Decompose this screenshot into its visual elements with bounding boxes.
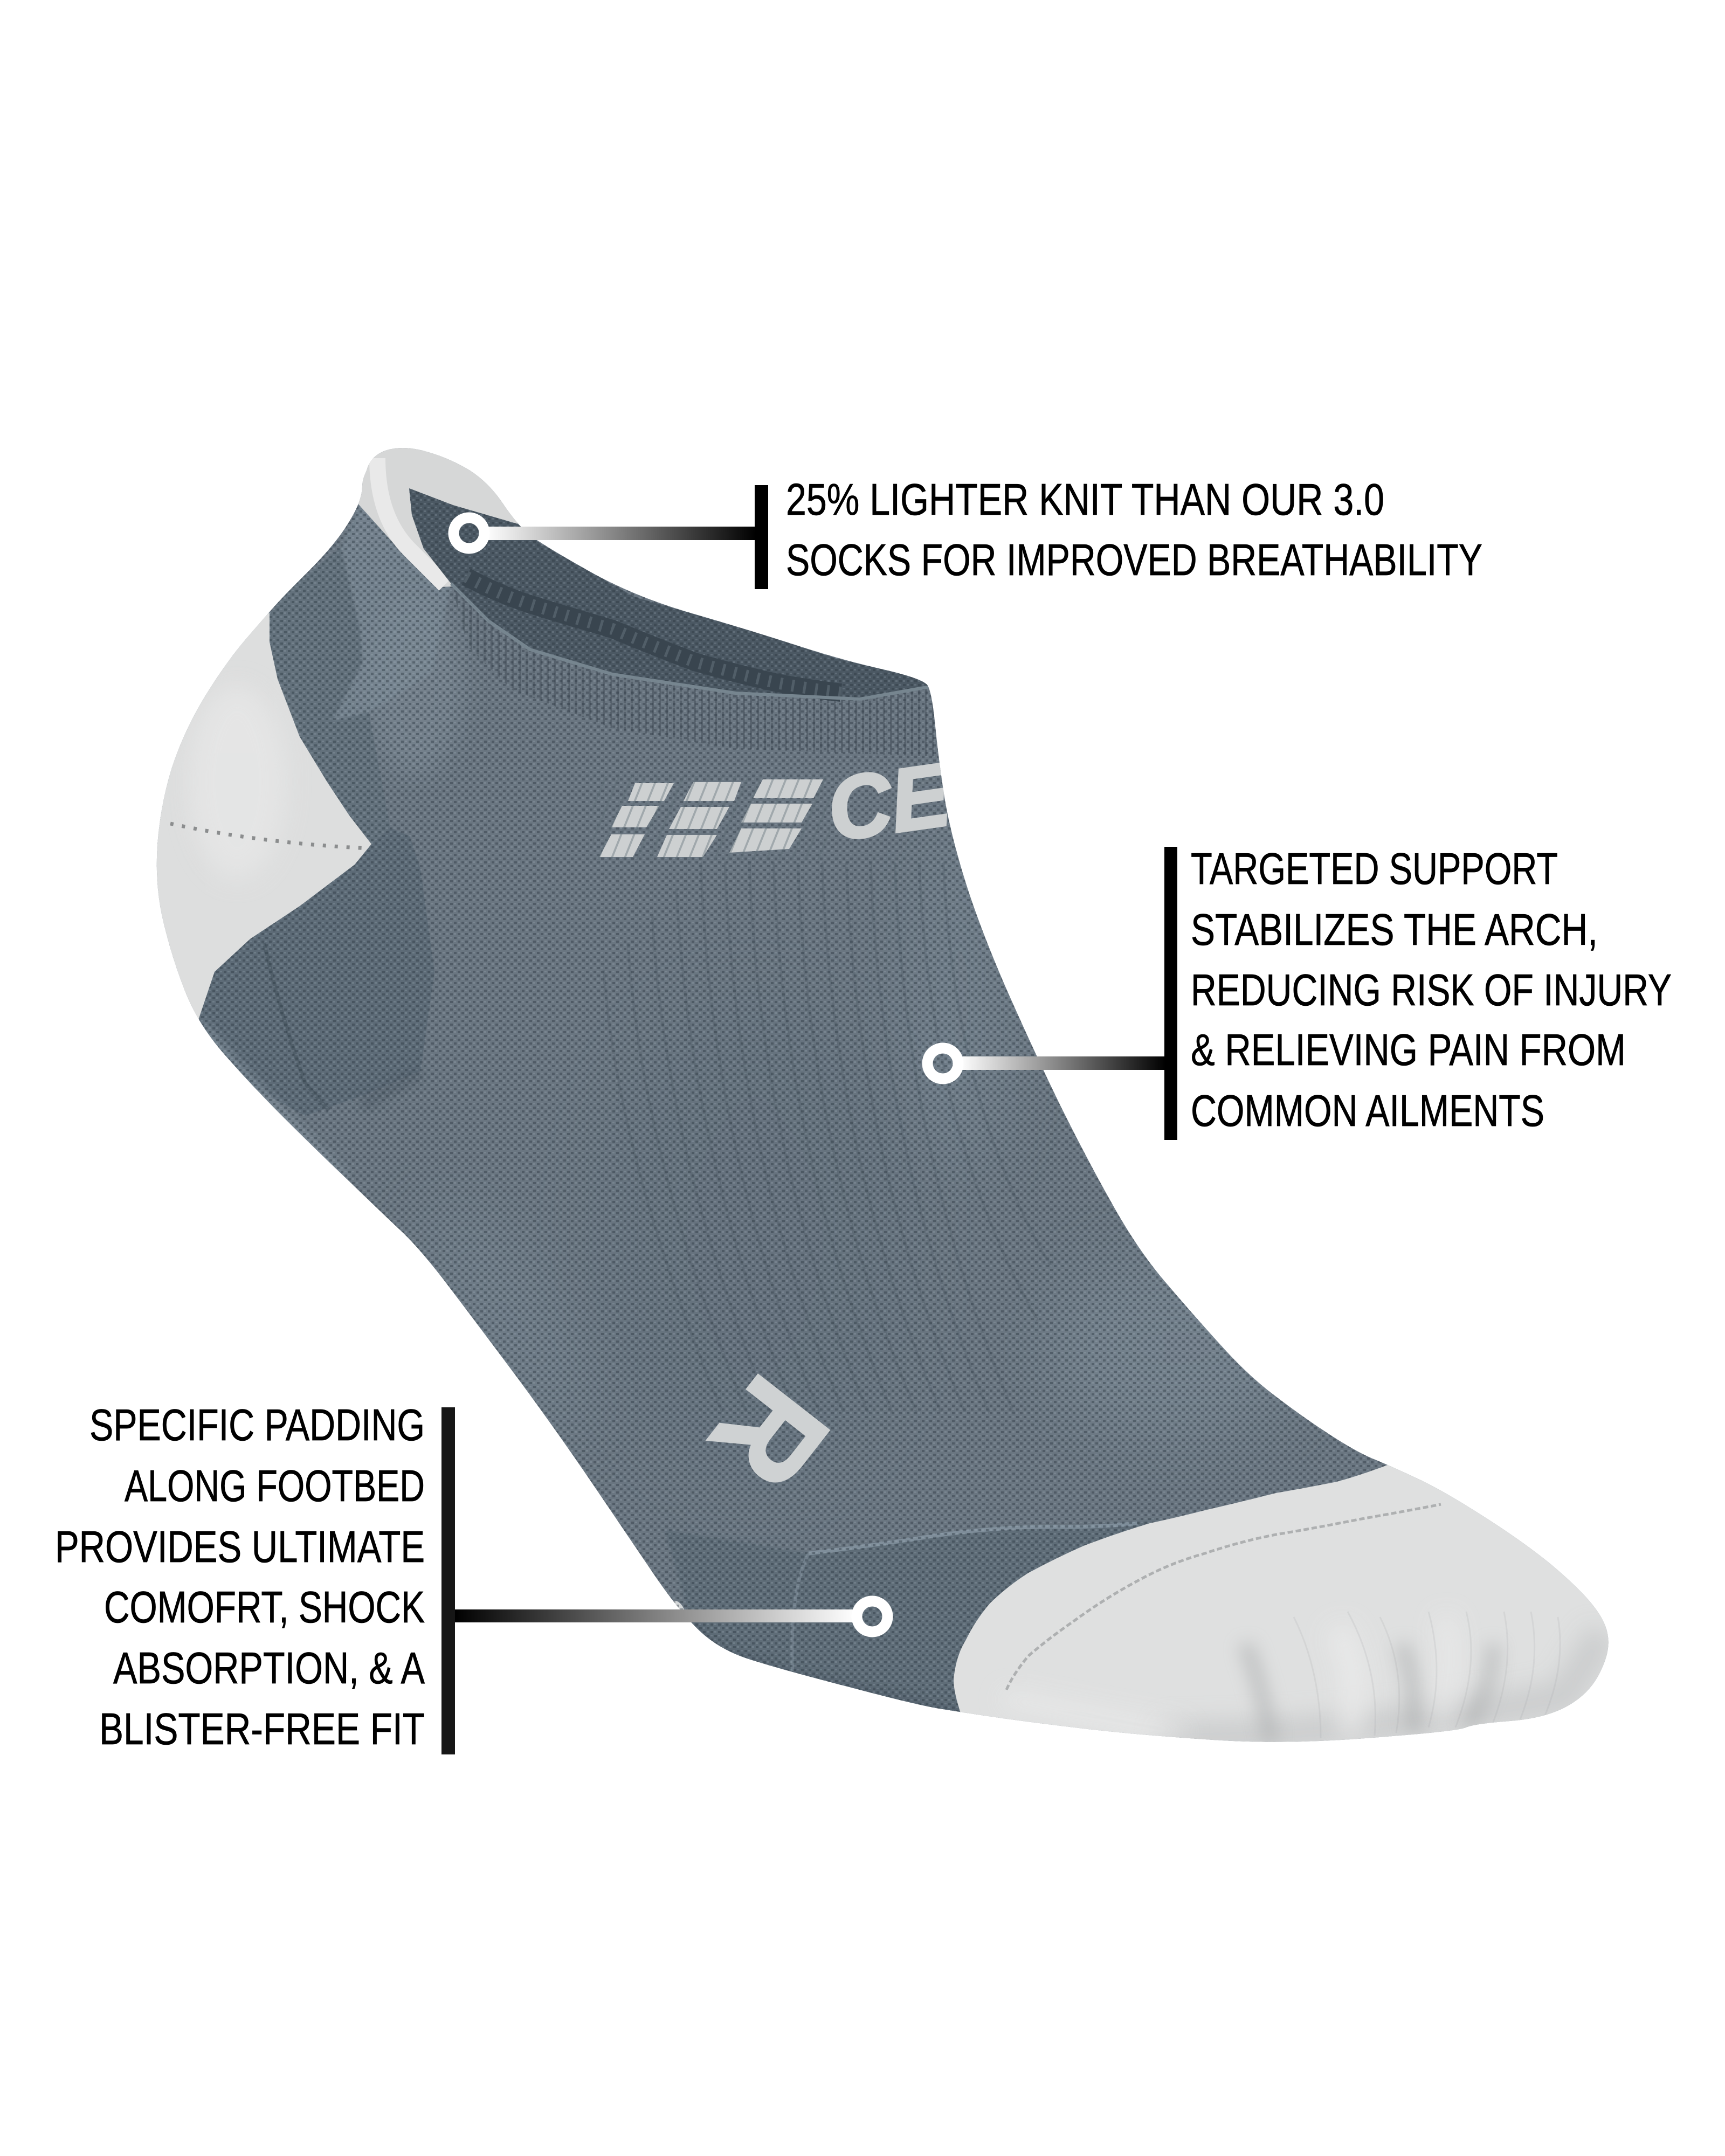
callout text: TARGETED SUPPORT	[1191, 844, 1558, 894]
midfoot rib lines	[604, 862, 1051, 1412]
toe fine ribs	[1294, 1612, 1560, 1738]
heel patch highlight	[189, 685, 286, 879]
marker ring	[927, 1048, 958, 1079]
connector line	[960, 1056, 1165, 1070]
callout text: PROVIDES ULTIMATE	[55, 1522, 425, 1572]
callout text: & RELIEVING PAIN FROM	[1191, 1025, 1626, 1075]
marker ring	[454, 517, 484, 549]
callout text: STABILIZES THE ARCH,	[1191, 904, 1598, 955]
callout bar	[755, 485, 768, 589]
callout text	[55, 1400, 425, 1754]
logo stitch gaps	[593, 776, 830, 860]
toe seam	[1006, 1504, 1441, 1690]
callout text: ABSORPTION, & A	[113, 1643, 425, 1693]
callout text: 25% LIGHTER KNIT THAN OUR 3.0	[786, 474, 1384, 524]
logo bars	[599, 779, 823, 857]
inner collar knit	[409, 488, 930, 699]
callout text	[786, 474, 1482, 585]
callout text	[1191, 844, 1672, 1136]
heel seam	[170, 824, 369, 848]
callout bar	[441, 1407, 455, 1754]
callout text: SOCKS FOR IMPROVED BREATHABILITY	[786, 535, 1482, 585]
tab edge highlight	[377, 458, 445, 585]
heel lower edge light	[198, 1024, 345, 1180]
sock illustration	[135, 431, 1671, 1779]
callout text: COMOFRT, SHOCK	[104, 1582, 425, 1632]
toe lower shading	[1159, 1633, 1604, 1738]
toe fold highlights	[1003, 1617, 1449, 1736]
knit texture	[135, 431, 1429, 1768]
heel light patch	[135, 593, 371, 1021]
heel tab light fabric	[350, 442, 539, 587]
toe cap light	[954, 1455, 1671, 1779]
heel dark lower panel	[198, 828, 434, 1116]
infographic canvas	[58, 448, 1671, 1754]
inner collar zigzag stitches	[466, 577, 841, 693]
padding seam	[809, 1523, 1137, 1553]
inner collar dark	[409, 488, 930, 699]
heel panel seam	[264, 943, 329, 1110]
callout: footbed padding	[55, 1400, 887, 1754]
sock body base	[135, 431, 1644, 1768]
toe fold shadows	[1245, 1644, 1493, 1744]
logo letters: CE	[822, 744, 958, 860]
inner collar stitched band	[466, 577, 841, 693]
right foot R mark: R	[682, 1350, 858, 1516]
connector line	[485, 527, 756, 540]
collar side light band	[333, 501, 451, 721]
sole padding panel	[665, 1520, 1159, 1719]
sole edge shadow	[674, 1609, 963, 1717]
heel tick shadow	[361, 1073, 420, 1105]
collar rim lip	[451, 584, 930, 699]
callout: lighter knit	[454, 474, 1482, 589]
callout text: BLISTER-FREE FIT	[99, 1704, 425, 1754]
callout: targeted support	[927, 844, 1672, 1140]
connector line	[454, 1609, 856, 1622]
padding vertical seam	[792, 1553, 809, 1671]
callout bar	[1164, 847, 1177, 1140]
heel dark upper band	[282, 583, 378, 765]
sole light stitches	[494, 1361, 695, 1637]
callout text: COMMON AILMENTS	[1191, 1086, 1544, 1136]
callout text: ALONG FOOTBED	[125, 1461, 425, 1511]
marker ring	[857, 1601, 887, 1632]
collar ribbing band	[451, 584, 941, 757]
callout text: SPECIFIC PADDING	[89, 1400, 425, 1450]
body lighting: highlights and shadows	[367, 593, 1305, 1477]
